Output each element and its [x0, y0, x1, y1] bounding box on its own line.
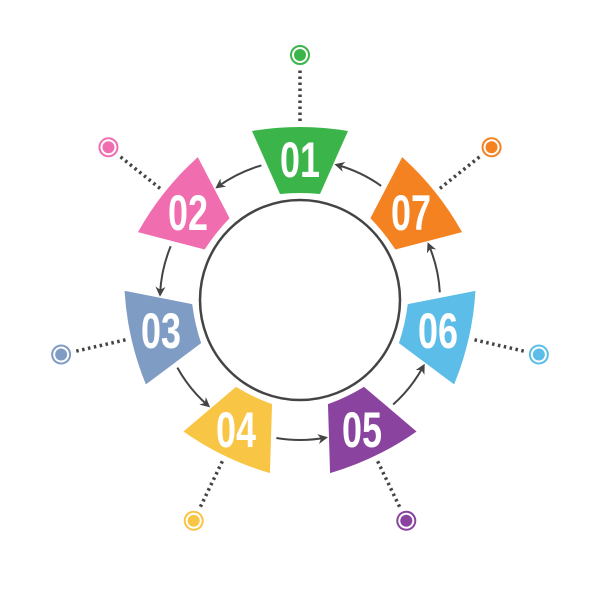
step 01: 01	[280, 132, 320, 188]
step 05: 05	[342, 402, 382, 458]
step 01	[252, 46, 348, 194]
step 02	[96, 135, 247, 271]
step 05	[303, 375, 418, 533]
step 03	[50, 277, 207, 385]
arrows	[143, 152, 450, 457]
step 04: 04	[216, 402, 256, 458]
step 03: 03	[141, 303, 181, 359]
center circle	[200, 200, 400, 400]
step 06	[393, 277, 550, 385]
step 07	[353, 135, 504, 271]
step 06: 06	[418, 303, 458, 359]
step 07: 07	[391, 185, 431, 241]
step 04	[182, 375, 297, 533]
step 02: 02	[168, 185, 208, 241]
